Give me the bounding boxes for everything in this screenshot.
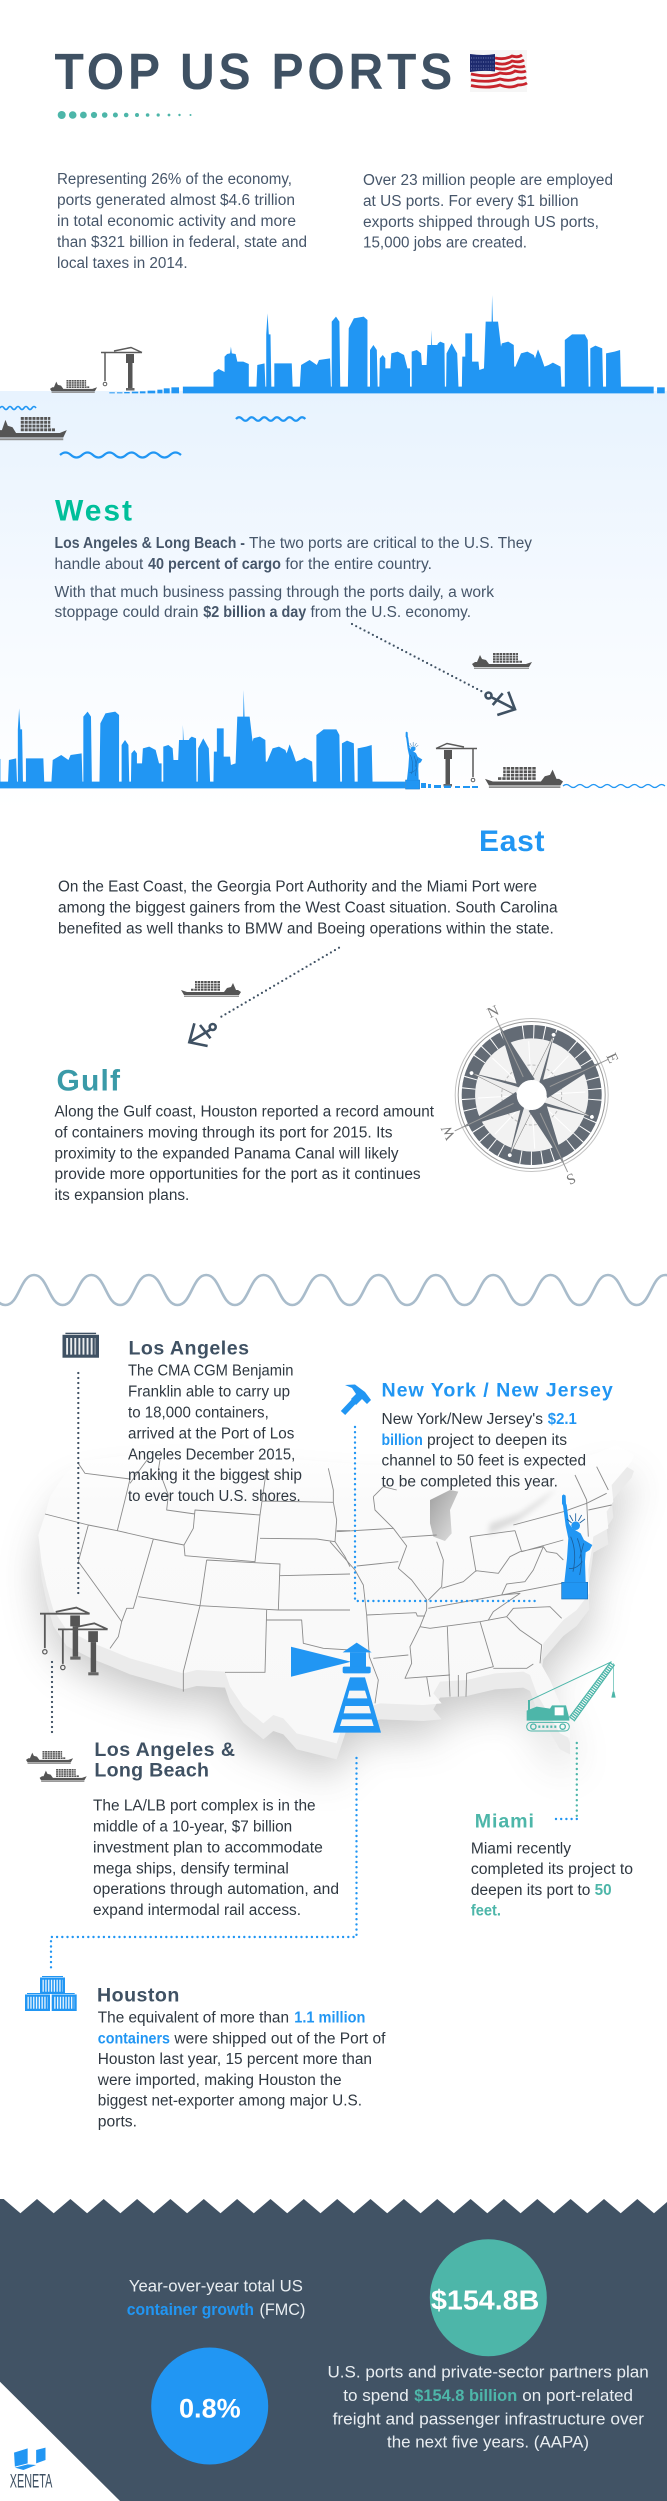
text block: houston: [97, 2009, 386, 2131]
text block: los angeles: [128, 1363, 302, 1505]
wave divider: [0, 1275, 667, 1305]
text block: los angeles: arrived at the Port of Los: [128, 1425, 295, 1442]
text block: long beach: investment plan to accommodate: [93, 1839, 323, 1856]
text block: miami: feet.: [471, 1903, 501, 1920]
icon: compass: E: [602, 1051, 621, 1066]
harbour dashes: [409, 782, 478, 788]
panel: west: [54, 495, 532, 621]
text block: container growth: container growth: [127, 2301, 254, 2319]
icon: ship west: [472, 654, 532, 669]
icon: statue of liberty small: [405, 732, 422, 789]
icon: two ships: [26, 1752, 87, 1782]
text block: los angeles: making it the biggest ship: [128, 1467, 302, 1484]
logo: xeneta: XENETA: [10, 2471, 52, 2492]
heading: new york: New York / New Jersey: [382, 1380, 614, 1402]
text block: west paragraph: stoppage could drain: [54, 604, 198, 621]
text block: gulf paragraph: of containers moving through its port for 2015. Its: [54, 1124, 393, 1141]
text block: gulf paragraph: [54, 1104, 435, 1204]
icon: ship under skyline left edge: [0, 418, 67, 440]
text block: container growth: Year-over-year total US: [129, 2278, 303, 2296]
text block: houston: biggest net-exporter among major U.S.: [98, 2093, 362, 2110]
icon: container: [62, 1333, 99, 1358]
text block: new york: billion: [382, 1432, 423, 1449]
title: TOP US PORTS: [54, 43, 456, 100]
text block: intro right: Over 23 million people are employed: [363, 172, 613, 189]
text block: new york: $2.1: [548, 1411, 577, 1428]
text block: miami: [471, 1840, 633, 1920]
state borders: [45, 1458, 612, 1703]
icon: american flag: [470, 50, 527, 92]
text block: gulf paragraph: proximity to the expanded Panama Canal will likely: [54, 1145, 399, 1162]
text block: intro left: than $321 billion in federal, state and: [57, 234, 307, 251]
map: united states: [38, 1445, 634, 1775]
icon: ship middle: [485, 768, 563, 788]
text block: new york: New York/New Jersey's: [382, 1411, 543, 1428]
arrow: dotted line to anchor east: [219, 948, 339, 1018]
icon: compass: [419, 982, 645, 1208]
text block: houston: were imported, making Houston the: [97, 2072, 342, 2089]
text block: east paragraph: among the biggest gainers from the West Coast situation. South Carolina: [58, 899, 558, 916]
text block: long beach: mega ships, densify terminal: [93, 1860, 289, 1877]
text block: west paragraph: for the entire country.: [285, 556, 432, 573]
text block: infrastructure spending: to spend: [343, 2387, 409, 2405]
text block: infrastructure spending: U.S. ports and private-sector partners plan: [328, 2364, 649, 2382]
text block: los angeles: Angeles December 2015,: [128, 1446, 295, 1463]
heading: gulf: Gulf: [56, 1065, 121, 1098]
dotted connector: houston: [51, 1758, 356, 1968]
text block: los angeles: to ever touch U.S. shores.: [128, 1488, 301, 1505]
panel: los angeles: [62, 1333, 302, 1505]
text block: west paragraph: Los Angeles & Long Beach -: [54, 535, 245, 552]
great lakes shading: [430, 1488, 557, 1541]
stat: $154.8B: $154.8B: [431, 2284, 539, 2315]
panel: footer: [0, 2199, 667, 2501]
text block: new york: project to deepen its: [427, 1432, 567, 1449]
panel: gulf: [54, 1065, 435, 1204]
icon: hammer: [343, 1384, 371, 1413]
text block: intro right: [363, 172, 613, 252]
text block: infrastructure spending: $154.8 billion: [414, 2387, 517, 2405]
icon: statue of liberty: [562, 1494, 592, 1599]
text block: long beach: operations through automation, and: [93, 1881, 339, 1898]
text block: intro right: exports shipped through US ports,: [363, 214, 599, 231]
icon: miami crane: [527, 1662, 616, 1731]
dotted connector: los angeles: [77, 1373, 79, 1594]
heading: miami: Miami: [475, 1811, 535, 1833]
dotted accent under title: [58, 111, 192, 119]
panel: water tint: [0, 391, 667, 811]
text block: long beach: middle of a 10-year, $7 billion: [93, 1818, 292, 1835]
text block: houston: were shipped out of the Port of: [173, 2030, 386, 2047]
arrow: dotted line to anchor: [352, 624, 483, 692]
text block: container growth: (FMC): [260, 2301, 305, 2319]
text block: west paragraph: [54, 535, 532, 621]
text block: new york: channel to 50 feet is expected: [382, 1453, 586, 1470]
text block: gulf paragraph: provide more opportunities for the port as it continues: [54, 1166, 421, 1183]
text block: east paragraph: benefited as well thanks to BMW and Boeing operations within the state.: [58, 920, 554, 937]
icon: lighthouse: [291, 1643, 381, 1733]
text block: east paragraph: [58, 879, 558, 937]
heading: long beach: Long Beach: [94, 1760, 210, 1782]
text block: infrastructure spending: [328, 2364, 649, 2452]
text block: houston: containers: [98, 2030, 170, 2047]
icon: container stack: [25, 1976, 77, 2011]
text block: west paragraph: The two ports are critical to the U.S. They: [249, 535, 532, 552]
heading: east: East: [479, 825, 544, 858]
text block: miami: completed its project to: [471, 1861, 633, 1878]
icon: ship east: [181, 982, 241, 997]
text block: west paragraph: $2 billion a day: [203, 604, 307, 621]
icon: anchor east: [189, 1023, 216, 1046]
text block: miami: deepen its port to: [471, 1882, 590, 1899]
heading: long beach: [94, 1739, 236, 1782]
waves: [0, 406, 665, 788]
text block: long beach: The LA/LB port complex is in the: [93, 1798, 316, 1815]
text block: houston: ports.: [98, 2114, 137, 2131]
text block: los angeles: Franklin able to carry up: [128, 1384, 290, 1401]
text block: intro left: ports generated almost $4.6 trillion: [57, 192, 295, 209]
text block: new york: to be completed this year.: [382, 1474, 558, 1491]
text block: west paragraph: 40 percent of cargo: [148, 556, 281, 573]
dotted connector: long beach: [51, 1662, 53, 1733]
icon: ship top left: [50, 381, 97, 393]
text block: miami: Miami recently: [471, 1840, 571, 1857]
icon: compass: N: [485, 1003, 502, 1022]
text block: intro left: local taxes in 2014.: [57, 255, 188, 272]
icon: compass: S: [564, 1169, 578, 1187]
text block: gulf paragraph: Along the Gulf coast, Houston reported a record amount: [54, 1104, 435, 1121]
text block: houston: The equivalent of more than: [98, 2009, 289, 2026]
skyline: top: [109, 295, 665, 393]
text block: miami: 50: [595, 1882, 612, 1899]
panel: long beach: [26, 1739, 339, 1919]
text block: infrastructure spending: on port-related: [522, 2387, 633, 2405]
logo: xeneta: [10, 2448, 52, 2492]
icon: crane middle: [436, 744, 477, 786]
text block: west paragraph: With that much business passing through the ports daily, a work: [54, 584, 494, 601]
text block: intro left: Representing 26% of the economy,: [57, 171, 292, 188]
text block: long beach: expand intermodal rail access.: [93, 1902, 301, 1919]
text block: new york: [382, 1411, 586, 1491]
heading: west: West: [55, 495, 132, 528]
skyline: middle: [0, 690, 405, 788]
text block: west paragraph: from the U.S. economy.: [310, 604, 471, 621]
text block: container growth: [127, 2278, 305, 2319]
text block: los angeles: The CMA CGM Benjamin: [128, 1363, 294, 1380]
icon: port cranes: [40, 1608, 108, 1675]
text block: infrastructure spending: the next five years. (AAPA): [387, 2434, 589, 2452]
dotted connector: new york: [355, 1427, 539, 1601]
panel: east: [58, 825, 558, 937]
text block: houston: Houston last year, 15 percent more than: [98, 2051, 372, 2068]
text block: east paragraph: On the East Coast, the Georgia Port Authority and the Miami Port were: [58, 879, 537, 896]
text block: intro left: in total economic activity and more: [57, 213, 296, 230]
text block: houston: 1.1 million: [294, 2009, 365, 2026]
panel: miami: [471, 1811, 633, 1920]
stat: 0.8%: [151, 2348, 268, 2464]
text block: intro right: at US ports. For every $1 billion: [363, 193, 578, 210]
heading: long beach: Los Angeles &: [94, 1739, 236, 1761]
panel: new york: [343, 1380, 614, 1491]
stat: 0.8%: 0.8%: [179, 2393, 241, 2423]
icon: compass: W: [438, 1122, 459, 1142]
icon: crane top: [101, 348, 142, 390]
text block: intro left: [57, 171, 307, 272]
text block: long beach: [93, 1798, 339, 1919]
text block: west paragraph: handle about: [54, 556, 144, 573]
panel: houston: [25, 1976, 386, 2131]
text block: infrastructure spending: freight and passenger infrastructure over: [333, 2410, 645, 2428]
text block: los angeles: to 18,000 containers,: [128, 1404, 269, 1421]
dotted connector: miami: [551, 1743, 577, 1819]
text block: intro right: 15,000 jobs are created.: [363, 234, 527, 252]
text block: gulf paragraph: its expansion plans.: [54, 1187, 189, 1204]
stat: $154.8B: [430, 2239, 547, 2356]
icon: anchor west: [486, 692, 515, 715]
heading: houston: Houston: [97, 1985, 180, 2007]
heading: los angeles: Los Angeles: [128, 1337, 250, 1359]
